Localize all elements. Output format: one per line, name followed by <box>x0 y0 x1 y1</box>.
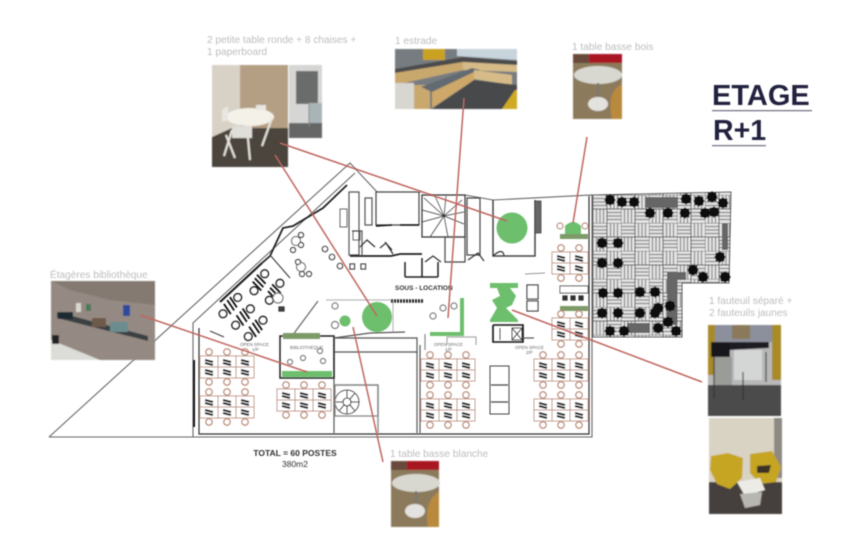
outer building outline <box>49 163 592 437</box>
desk clusters <box>200 245 588 428</box>
photo: table basse blanche <box>391 461 440 527</box>
photo: table basse bois <box>573 54 622 119</box>
line: table basse blanche <box>353 327 383 462</box>
line: fauteuils <box>512 310 702 382</box>
photo: round table room <box>212 65 288 167</box>
plan room labels: BIBLIOTHEQUE <box>290 345 323 350</box>
red connector lines <box>140 98 702 462</box>
photo: fauteuils jaunes <box>709 418 782 514</box>
plan room labels <box>240 285 544 355</box>
kitchen furniture <box>340 201 545 301</box>
caption: table basse bois: 1 table basse bois <box>572 42 653 53</box>
stairs spiral <box>422 196 464 237</box>
caption: fauteuils: 2 fauteuils jaunes <box>709 308 788 319</box>
line: estrade <box>448 98 464 318</box>
round staircase <box>335 385 378 416</box>
plan room labels: SOUS - LOCATION <box>395 285 453 292</box>
total summary: TOTAL = 60 POSTES <box>253 448 337 458</box>
floor plan <box>49 163 592 437</box>
line: étagères <box>140 315 307 372</box>
caption: fauteuils: 1 fauteuil séparé + <box>709 296 792 307</box>
angled desks: lower group <box>216 291 270 343</box>
title: R+1 <box>713 115 766 147</box>
title <box>712 80 812 147</box>
line: table ronde 1 <box>275 155 377 316</box>
photo: étagères bibliothèque <box>51 281 155 360</box>
plan room labels: 1/P <box>445 347 452 352</box>
plan room labels: OPEN SPACE <box>515 345 544 350</box>
plan room labels: OPEN SPACE <box>240 342 269 347</box>
line: table basse bois <box>573 137 587 223</box>
round tables and chairs <box>273 223 588 364</box>
photo: fauteuil séparé <box>708 325 781 416</box>
total summary: 380m2 <box>282 459 308 469</box>
plan room labels: 1/P <box>252 347 259 352</box>
walls <box>194 185 589 434</box>
caption: table ronde: 1 paperboard <box>207 47 267 58</box>
photo: paperboard <box>289 65 322 138</box>
caption: étagères: Étagères bibliothèque <box>50 268 148 281</box>
caption: table basse blanche: 1 table basse blanche <box>390 449 489 460</box>
caption: estrade: 1 estrade <box>395 36 437 47</box>
green zones <box>282 212 588 377</box>
terrace <box>593 191 731 337</box>
caption: table ronde: 2 petite table ronde + 8 chaises + <box>207 35 356 46</box>
photo: estrade <box>395 49 517 109</box>
title: ETAGE <box>712 80 810 112</box>
line: table ronde 2 <box>280 143 507 221</box>
plan room labels: 2/P <box>526 350 533 355</box>
plan room labels: OPEN SPACE <box>434 342 463 347</box>
angled desks: upper group <box>247 267 287 307</box>
